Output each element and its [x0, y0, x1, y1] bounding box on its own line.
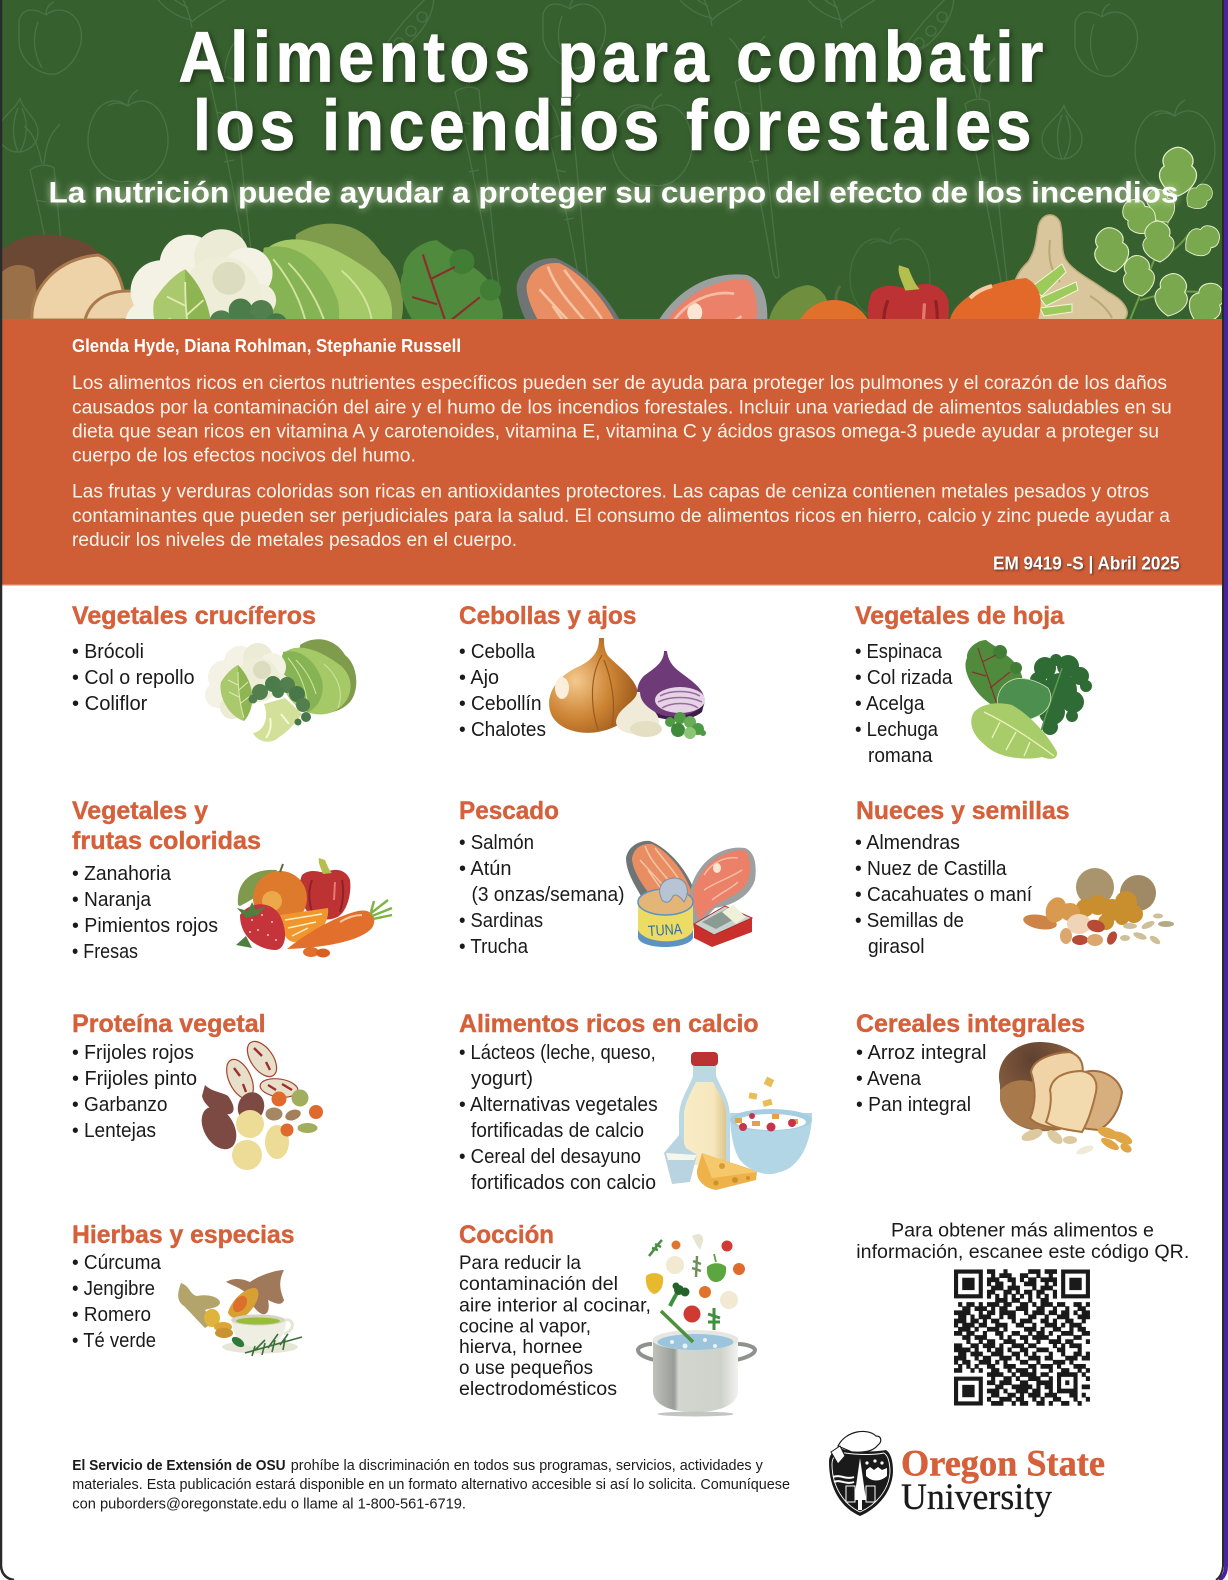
heading: Vegetales y — [72, 797, 208, 825]
icon: ginger, turmeric, green tea, rosemary — [178, 1270, 302, 1356]
list — [72, 641, 194, 715]
cooking paragraph: Para reducir la — [459, 1252, 581, 1274]
QR call to action: información, escanee este código QR. — [856, 1241, 1189, 1263]
logo wordmark — [901, 1444, 1105, 1518]
logo wordmark: Oregon State — [901, 1444, 1105, 1484]
list — [459, 1042, 658, 1194]
icon: milk, cereal, yogurt, cheese — [664, 1052, 812, 1190]
heading: Vegetales de hoja — [855, 602, 1065, 630]
panel: pescado — [459, 797, 756, 958]
icon: salmon and canned fish — [626, 841, 756, 947]
banner vegetables — [2, 147, 1228, 429]
icon: nuts and seeds — [1022, 868, 1174, 946]
list: • Acelga — [855, 693, 925, 715]
non-discrimination footnote: prohíbe la discriminación en todos sus programas, servicios, actividades y — [291, 1457, 763, 1474]
list: • Almendras — [855, 832, 960, 854]
heading — [72, 797, 261, 855]
heading: Proteína vegetal — [72, 1010, 266, 1038]
intro paragraph 1 — [72, 373, 1172, 466]
panel: vegetales de hoja — [855, 602, 1092, 767]
list: romana — [868, 745, 933, 767]
list: • Sardinas — [459, 910, 543, 932]
Oregon State University logo — [829, 1431, 1105, 1518]
list: • Cereal del desayuno — [459, 1146, 641, 1168]
intro paragraph 2 — [72, 482, 1170, 551]
list: fortificadas de calcio — [471, 1120, 644, 1142]
banner: salmon fillet — [517, 258, 631, 380]
list: • Té verde — [72, 1330, 156, 1352]
cooking paragraph: electrodomésticos — [459, 1378, 617, 1400]
list: • Alternativas vegetales — [459, 1094, 658, 1116]
panel: cebollas y ajos — [459, 602, 706, 741]
panel: alimentos ricos en calcio — [459, 1010, 812, 1194]
cooking paragraph: cocine al vapor, — [459, 1316, 591, 1338]
cooking paragraph: hierva, hornee — [459, 1336, 583, 1358]
list: • Trucha — [459, 936, 529, 958]
icon: salmon and canned fish: TUNA — [647, 921, 683, 940]
icon: beans and legumes — [195, 1036, 323, 1170]
background vegetable doodles — [0, 0, 1215, 366]
list — [72, 863, 218, 963]
banner: cabbage — [260, 224, 403, 366]
non-discrimination footnote — [72, 1457, 790, 1512]
heading: Cereales integrales — [856, 1010, 1085, 1038]
intro paragraph 2: reducir los niveles de metales pesados en el cuerpo. — [72, 530, 517, 551]
list: • Semillas de — [855, 910, 964, 932]
title — [178, 18, 1048, 166]
list — [856, 1042, 986, 1116]
list — [72, 1042, 197, 1142]
panel: nueces y semillas — [855, 797, 1174, 958]
heading: frutas coloridas — [72, 827, 261, 855]
list — [459, 832, 624, 958]
list: • Atún — [459, 858, 512, 880]
panel: proteína vegetal — [72, 1010, 323, 1170]
list: • Romero — [72, 1304, 151, 1326]
panel: cocción — [459, 1221, 755, 1416]
list — [72, 1252, 162, 1352]
header banner — [0, 0, 1228, 429]
cooking paragraph: contaminación del — [459, 1273, 618, 1295]
banner: broccoli — [204, 298, 297, 396]
banner: red pepper — [868, 265, 949, 363]
heading: Alimentos ricos en calcio — [459, 1010, 759, 1038]
list: • Coliflor — [72, 693, 148, 715]
banner: carrot with greens — [950, 264, 1078, 320]
banner: ginger — [1011, 215, 1127, 320]
list: • Pimientos rojos — [72, 915, 218, 937]
non-discrimination footnote: El Servicio de Extensión de OSU — [72, 1457, 286, 1474]
icon: colorful fruits and vegetables — [236, 858, 392, 958]
intro paragraph 2: Las frutas y verduras coloridas son ricas en antioxidantes protectores. Las capas de ceniza contienen metales pesados y otros — [72, 482, 1149, 502]
list: • Cúrcuma — [72, 1252, 162, 1274]
list: • Lácteos (leche, queso, — [459, 1042, 656, 1064]
logo shield — [829, 1431, 893, 1516]
heading: Cocción — [459, 1221, 554, 1249]
icon: whole grain bread — [999, 1042, 1134, 1156]
list: • Brócoli — [72, 641, 144, 663]
list: • Cacahuates o maní — [855, 884, 1032, 906]
banner: cilantro — [1090, 147, 1228, 330]
list — [459, 641, 546, 741]
list: • Lechuga — [855, 719, 939, 741]
heading: Cebollas y ajos — [459, 602, 636, 630]
intro paragraph 2: contaminantes que pueden ser perjudiciales para la salud. El consumo de alimentos ricos en hierro, calcio y zinc puede ayudar a — [72, 506, 1170, 527]
cooking paragraph — [459, 1252, 651, 1400]
heading: Hierbas y especias — [72, 1221, 294, 1249]
panel: cereales integrales — [856, 1010, 1134, 1156]
list: • Frijoles pinto — [72, 1068, 197, 1090]
banner: cauliflower — [125, 229, 276, 371]
list: • Jengibre — [72, 1278, 155, 1300]
list: • Espinaca — [855, 641, 943, 663]
QR call to action — [856, 1220, 1189, 1263]
QR code — [954, 1270, 1090, 1405]
intro paragraph 1: dieta que sean ricos en vitamina A y carotenoides, vitamina E, vitamina C y ácidos grasos omega-3 puede ayudar a proteger su — [72, 422, 1159, 442]
list: yogurt) — [471, 1068, 533, 1090]
publication number: EM 9419 -S | Abril 2025 — [993, 552, 1180, 574]
list: • Nuez de Castilla — [855, 858, 1007, 880]
orange intro panel — [0, 319, 1228, 586]
intro paragraph 1: cuerpo de los efectos nocivos del humo. — [72, 446, 416, 466]
cooking paragraph: o use pequeños — [459, 1357, 593, 1379]
list: • Col rizada — [855, 667, 953, 689]
icon: cabbage, cauliflower, broccoli — [205, 639, 356, 742]
banner: bread — [2, 235, 206, 320]
subtitle: La nutrición puede ayudar a proteger su cuerpo del efecto de los incendios — [48, 176, 1178, 210]
list: girasol — [868, 936, 924, 958]
list: • Zanahoria — [72, 863, 172, 885]
list: fortificados con calcio — [471, 1172, 656, 1194]
intro paragraph 1: causados por la contaminación del aire y el humo de los incendios forestales. Incluir una variedad de alimentos saludables en su — [72, 398, 1172, 418]
banner: orange and leaf — [769, 285, 873, 378]
panel: hierbas y especias — [72, 1221, 302, 1356]
list: • Pan integral — [856, 1094, 971, 1116]
QR call to action: Para obtener más alimentos e — [891, 1220, 1154, 1242]
list: • Fresas — [72, 941, 138, 963]
title: Alimentos para combatir — [178, 18, 1048, 98]
list: • Arroz integral — [856, 1042, 986, 1064]
banner: salmon steak — [644, 274, 767, 429]
intro paragraph 1: Los alimentos ricos en ciertos nutrientes específicos pueden ser de ayuda para proteger los pulmones y el corazón de los daños — [72, 373, 1167, 394]
title: los incendios forestales — [193, 87, 1036, 166]
list: • Chalotes — [459, 719, 546, 741]
authors: Glenda Hyde, Diana Rohlman, Stephanie Russell — [72, 336, 461, 356]
icon: leafy greens — [965, 640, 1092, 759]
list: • Avena — [856, 1068, 922, 1090]
heading: Pescado — [459, 797, 559, 825]
logo wordmark: University — [901, 1477, 1052, 1518]
list — [855, 832, 1032, 958]
list: • Col o repollo — [72, 667, 194, 689]
list: • Cebolla — [459, 641, 536, 663]
heading: Nueces y semillas — [856, 797, 1070, 825]
panel: vegetales crucíferos — [72, 602, 356, 742]
cooking paragraph: aire interior al cocinar, — [459, 1294, 651, 1316]
icon: onions and garlic — [549, 638, 706, 739]
non-discrimination footnote: con puborders@oregonstate.edu o llame al 1-800-561-6719. — [72, 1496, 466, 1512]
list: • Frijoles rojos — [72, 1042, 194, 1064]
list: • Garbanzo — [72, 1094, 168, 1116]
list: (3 onzas/semana) — [472, 884, 624, 906]
list: • Lentejas — [72, 1120, 156, 1142]
non-discrimination footnote: materiales. Esta publicación estará disponible en un formato alternativo accesible si así lo solicita. Comuníquese — [72, 1476, 790, 1493]
banner: chard — [401, 240, 503, 361]
list: • Ajo — [459, 667, 499, 689]
list — [855, 641, 953, 767]
list: • Cebollín — [459, 693, 542, 715]
icon: boiling pot with falling vegetables — [638, 1234, 755, 1416]
panel: vegetales y frutas coloridas — [72, 797, 392, 963]
heading: Vegetales crucíferos — [72, 602, 316, 630]
list: • Salmón — [459, 832, 534, 854]
list: • Naranja — [72, 889, 152, 911]
